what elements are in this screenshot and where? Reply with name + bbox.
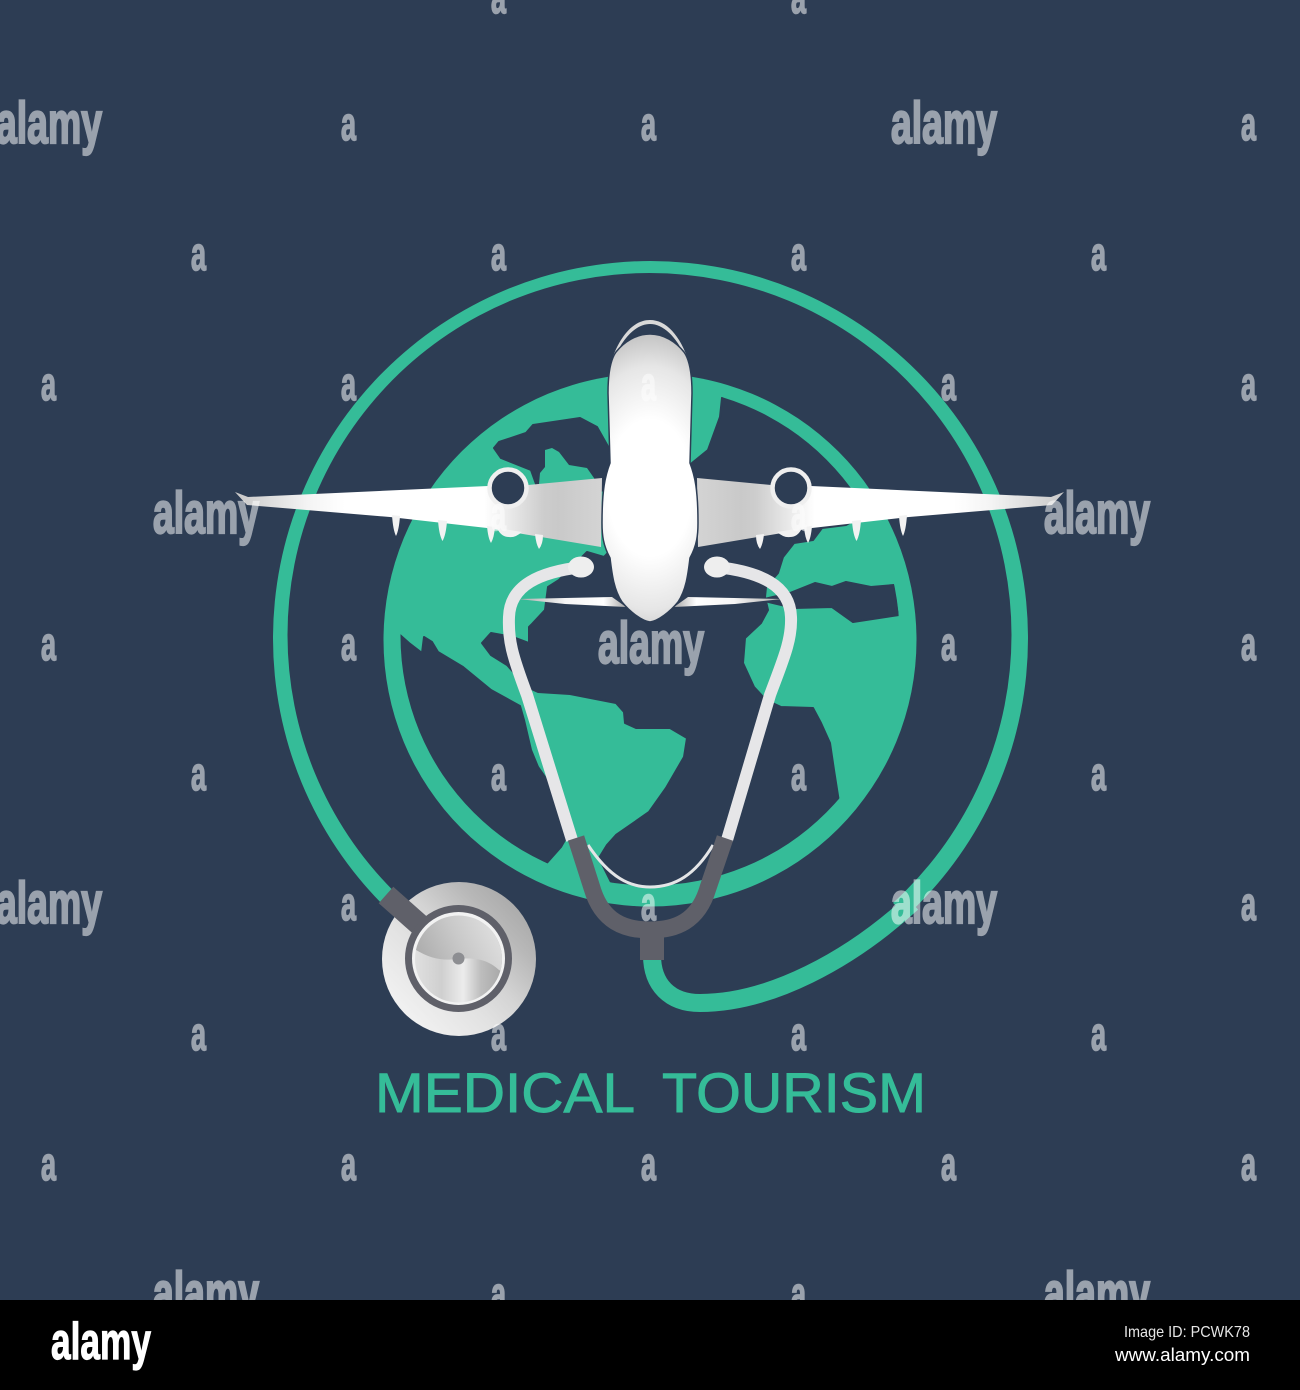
spring loop bbox=[588, 845, 713, 887]
right tailplane bbox=[674, 597, 782, 607]
dark ring bbox=[408, 908, 508, 1008]
watermark grid: a bbox=[41, 357, 56, 410]
chestpiece bbox=[382, 882, 536, 1036]
watermark grid: a bbox=[1241, 617, 1256, 670]
watermark grid: alamy bbox=[598, 611, 704, 676]
watermark grid: a bbox=[641, 1137, 656, 1190]
watermark grid: a bbox=[341, 877, 356, 930]
watermark grid: alamy bbox=[1044, 481, 1150, 546]
watermark grid: alamy bbox=[891, 871, 997, 936]
left wing bbox=[235, 470, 602, 549]
footer logo: alamy bbox=[51, 1313, 151, 1371]
watermark grid: alamy bbox=[153, 1261, 259, 1326]
left earpiece bbox=[568, 556, 594, 578]
yoke bbox=[576, 838, 725, 930]
watermark grid: alamy bbox=[891, 91, 997, 156]
watermark grid: a bbox=[941, 1137, 956, 1190]
globe bbox=[384, 376, 916, 906]
watermark grid: alamy bbox=[0, 91, 102, 156]
watermark grid: a bbox=[341, 617, 356, 670]
watermark grid: a bbox=[1091, 747, 1106, 800]
watermark grid: a bbox=[341, 97, 356, 150]
watermark grid: alamy bbox=[0, 871, 102, 936]
neck bbox=[386, 895, 430, 934]
oceans bbox=[400, 396, 899, 886]
watermark grid: a bbox=[341, 357, 356, 410]
watermark grid: a bbox=[941, 357, 956, 410]
watermark grid: a bbox=[791, 1267, 806, 1320]
watermark grid: a bbox=[341, 1137, 356, 1190]
watermark grid: a bbox=[191, 227, 206, 280]
watermark grid: alamy bbox=[153, 481, 259, 546]
watermark grid: a bbox=[491, 227, 506, 280]
title: MEDICAL bbox=[375, 1061, 635, 1124]
footer bar bbox=[0, 1300, 1300, 1390]
watermark grid: a bbox=[791, 1007, 806, 1060]
airplane bbox=[235, 320, 1064, 622]
watermark grid: a bbox=[41, 617, 56, 670]
nose crescent bbox=[611, 320, 689, 362]
outer metal disc bbox=[382, 882, 536, 1036]
watermark grid: a bbox=[941, 617, 956, 670]
watermark grid: alamy bbox=[1044, 1261, 1150, 1326]
watermark grid: a bbox=[491, 747, 506, 800]
watermark grid: a bbox=[641, 97, 656, 150]
inner diaphragm bbox=[415, 916, 502, 1002]
website: www.alamy.com bbox=[1114, 1345, 1250, 1365]
title bbox=[375, 1061, 926, 1124]
image id: Image ID: PCWK78 bbox=[1124, 1324, 1250, 1341]
yoke stem bbox=[640, 925, 664, 960]
watermark grid: a bbox=[1241, 357, 1256, 410]
watermark grid: a bbox=[791, 487, 806, 540]
island in northern sea bbox=[538, 448, 600, 495]
stethoscope tube forming outer ring bbox=[273, 261, 1028, 1016]
right ear tube bbox=[717, 567, 791, 840]
stethoscope bbox=[382, 556, 791, 1036]
watermark grid: a bbox=[791, 227, 806, 280]
center dot bbox=[452, 952, 464, 964]
watermark grid: a bbox=[491, 487, 506, 540]
watermark grid: a bbox=[491, 1007, 506, 1060]
left ear tube bbox=[509, 567, 582, 840]
watermark grid: a bbox=[191, 747, 206, 800]
tube tail bbox=[652, 903, 912, 1003]
globe land disc bbox=[384, 374, 916, 906]
title: TOURISM bbox=[662, 1061, 926, 1124]
watermark grid: a bbox=[641, 877, 656, 930]
watermark grid: a bbox=[1091, 1007, 1106, 1060]
watermark grid: a bbox=[1241, 1137, 1256, 1190]
watermark grid: a bbox=[1241, 97, 1256, 150]
watermark grid: a bbox=[1091, 227, 1106, 280]
right wing bbox=[697, 470, 1064, 549]
watermark grid: a bbox=[791, 747, 806, 800]
fuselage bbox=[602, 334, 698, 622]
ring arc bbox=[273, 261, 1028, 907]
watermark grid: a bbox=[41, 1137, 56, 1190]
right earpiece bbox=[704, 556, 730, 578]
watermark grid: a bbox=[1241, 877, 1256, 930]
watermark grid: a bbox=[641, 357, 656, 410]
left tailplane bbox=[518, 597, 626, 607]
watermark grid: a bbox=[191, 1007, 206, 1060]
watermark grid: a bbox=[491, 1267, 506, 1320]
